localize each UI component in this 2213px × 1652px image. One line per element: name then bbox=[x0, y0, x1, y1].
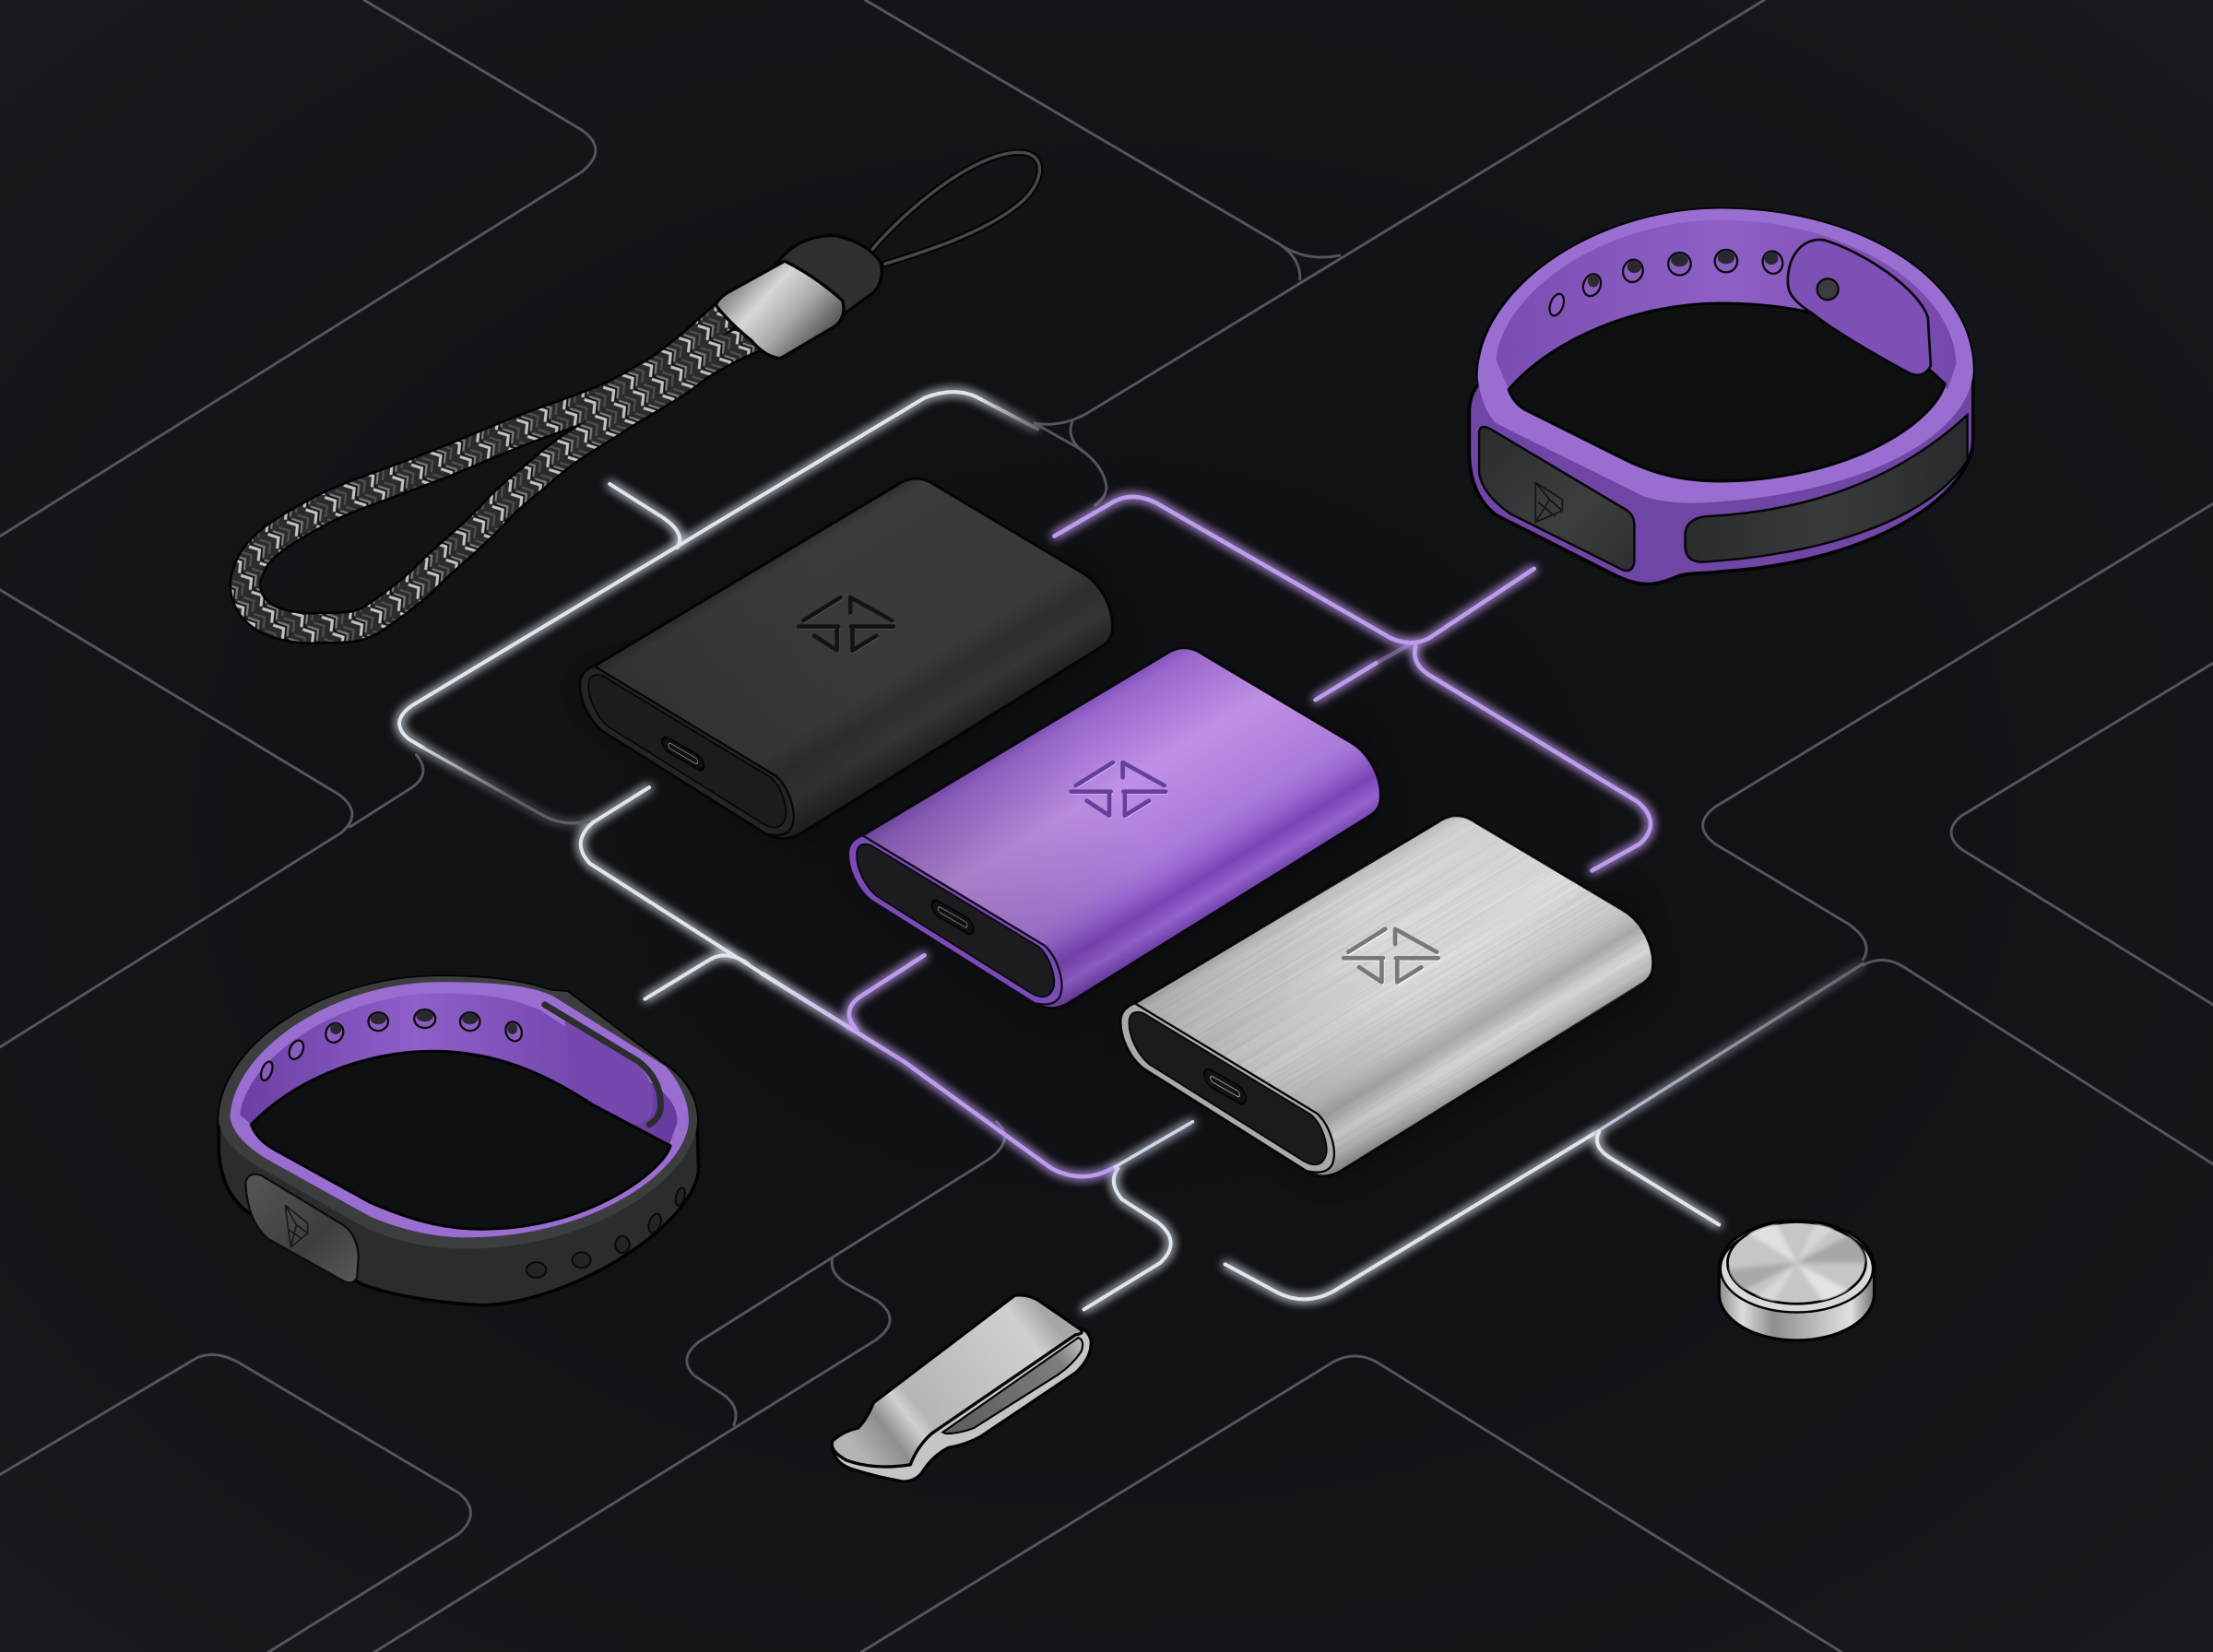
black wristband: plate logo bbox=[285, 1205, 308, 1247]
wristband: inner wall bbox=[1496, 220, 1956, 389]
clip: top plate bbox=[832, 1295, 1082, 1467]
black wristband: inner strap holes bbox=[259, 1009, 525, 1082]
clip: inner loop bbox=[942, 1338, 1083, 1434]
black wristband: sensor plate bbox=[245, 1174, 359, 1282]
wristband: black sensor plate bbox=[1479, 427, 1634, 571]
black wristband: purple lining bbox=[230, 982, 689, 1237]
glowing purple traces bbox=[763, 497, 1651, 1176]
black wristband: buckle flap bbox=[545, 1005, 660, 1125]
black wristband: centre opening bbox=[251, 1051, 670, 1229]
wristband: body silhouette bbox=[1469, 209, 1973, 584]
metal belt clip bbox=[832, 1295, 1091, 1481]
silver power bank bbox=[1119, 814, 1654, 1178]
wristband: black side band bbox=[1686, 415, 1968, 562]
metal button coin bbox=[1715, 1213, 1877, 1340]
black wristband with purple lining (bottom left) bbox=[219, 976, 699, 1305]
wristband: plate logo bbox=[1535, 482, 1562, 522]
black power bank bbox=[580, 478, 1112, 839]
wristband: top rim bbox=[1478, 209, 1973, 503]
purple wristband (top right) bbox=[1469, 209, 1973, 584]
purple power bank: end cap bbox=[848, 835, 1061, 1005]
strap: metal ferrule bbox=[716, 261, 844, 359]
coin: spun top face bbox=[1726, 1222, 1867, 1305]
wristband: centre opening bbox=[1509, 303, 1945, 481]
black wristband: inner wall bbox=[240, 994, 678, 1146]
wristband: strap holes bbox=[1547, 249, 1785, 317]
wristband: buckle flap bbox=[1788, 240, 1931, 375]
black power bank: logo bbox=[799, 597, 894, 652]
black power bank: end cap bbox=[580, 666, 794, 835]
wristband: snap stud bbox=[1817, 278, 1839, 300]
black wristband: outer strap holes bbox=[527, 1186, 687, 1278]
glowing white traces bbox=[399, 392, 1863, 1309]
black wristband: top rim bbox=[219, 976, 697, 1249]
purple power bank: logo bbox=[1071, 762, 1166, 817]
black wristband: body silhouette bbox=[219, 976, 699, 1305]
strap: braided rope bbox=[245, 314, 758, 628]
purple power bank bbox=[848, 648, 1380, 1009]
silver power bank: logo bbox=[1343, 929, 1439, 984]
clip: lower plate bbox=[833, 1328, 1091, 1481]
braided wrist strap bbox=[245, 152, 1039, 628]
strap: thin cord loop bbox=[870, 152, 1039, 264]
silver power bank: end cap bbox=[1120, 1003, 1334, 1173]
coin: base and side bbox=[1719, 1221, 1875, 1340]
strap: black end cap bbox=[776, 236, 882, 316]
coin: stepped rim bbox=[1721, 1225, 1873, 1312]
